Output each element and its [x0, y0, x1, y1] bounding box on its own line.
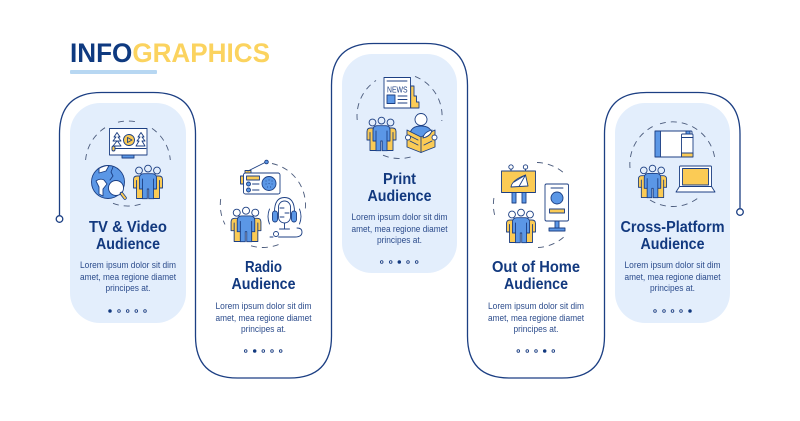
body text: amet, mea regione diamet — [624, 272, 721, 282]
heading line 2: Audience — [640, 236, 705, 253]
pagination dots — [517, 350, 555, 352]
start dot — [56, 216, 63, 222]
heading line 2: Audience — [368, 188, 432, 205]
body text: Lorem ipsum dolor sit dim — [352, 212, 448, 222]
pagination dots — [654, 310, 691, 312]
icon group: Radio — [220, 160, 305, 248]
icon: people — [506, 209, 536, 243]
panel background: TV & Video — [70, 103, 186, 323]
icon: billboard — [502, 165, 536, 203]
body text: amet, mea regione diamet — [488, 313, 584, 323]
heading: TV & Video: TV & Video — [89, 219, 167, 236]
body text — [488, 301, 584, 334]
body text: principes at. — [106, 283, 150, 293]
icon: tablet and phone — [655, 131, 693, 157]
heading line 2: Audience — [504, 276, 568, 293]
icon: newspaper: NEWS — [387, 84, 408, 94]
icon: microphone — [268, 198, 302, 237]
body text: principes at. — [514, 324, 558, 334]
body text: principes at. — [650, 283, 695, 293]
connecting outline — [60, 44, 740, 378]
heading line 2: Audience — [96, 236, 160, 253]
icon: people — [367, 117, 396, 151]
body text: Lorem ipsum dolor sit dim — [80, 260, 176, 270]
panel background: Print — [342, 54, 457, 273]
pagination dots — [109, 310, 146, 312]
heading: Radio: Radio — [245, 259, 282, 276]
body text — [80, 260, 176, 293]
pagination dots — [380, 261, 418, 263]
body text: principes at. — [377, 235, 422, 245]
body text — [352, 212, 448, 245]
icon: kiosk — [545, 184, 568, 231]
body text — [624, 260, 721, 293]
title: INFOGRAPHICS — [70, 38, 270, 68]
body text: Lorem ipsum dolor sit dim — [624, 260, 720, 270]
body text: amet, mea regione diamet — [216, 313, 312, 323]
body text — [216, 301, 312, 334]
icon: monitor — [110, 128, 147, 158]
icon group: Cross-Platform — [630, 122, 715, 207]
body text: principes at. — [241, 324, 286, 334]
icon group: Print — [357, 76, 442, 159]
pagination dots — [244, 350, 282, 352]
icon: radio — [240, 160, 280, 194]
title underline — [70, 70, 157, 74]
body text: Lorem ipsum dolor sit dim — [488, 301, 584, 311]
icon group: TV & Video — [86, 121, 170, 206]
body text: amet, mea regione diamet — [80, 272, 176, 282]
body text: amet, mea regione diamet — [352, 224, 448, 234]
body text: Lorem ipsum dolor sit dim — [216, 301, 312, 311]
heading: Cross-Platform: Cross-Platform — [620, 219, 724, 236]
heading: Out of Home: Out of Home — [492, 259, 580, 276]
icon: globe with magnifier — [92, 166, 125, 198]
icon group: Out of Home — [493, 162, 568, 248]
icon: people — [231, 207, 261, 242]
icon: people — [638, 165, 667, 198]
icon: reader with book — [406, 114, 437, 152]
icon: laptop — [676, 166, 715, 192]
icon: people — [134, 165, 162, 199]
panel background: Cross-Platform — [615, 103, 730, 323]
heading line 2: Audience — [232, 276, 296, 293]
heading: Print: Print — [383, 171, 416, 188]
end dot — [737, 209, 743, 215]
